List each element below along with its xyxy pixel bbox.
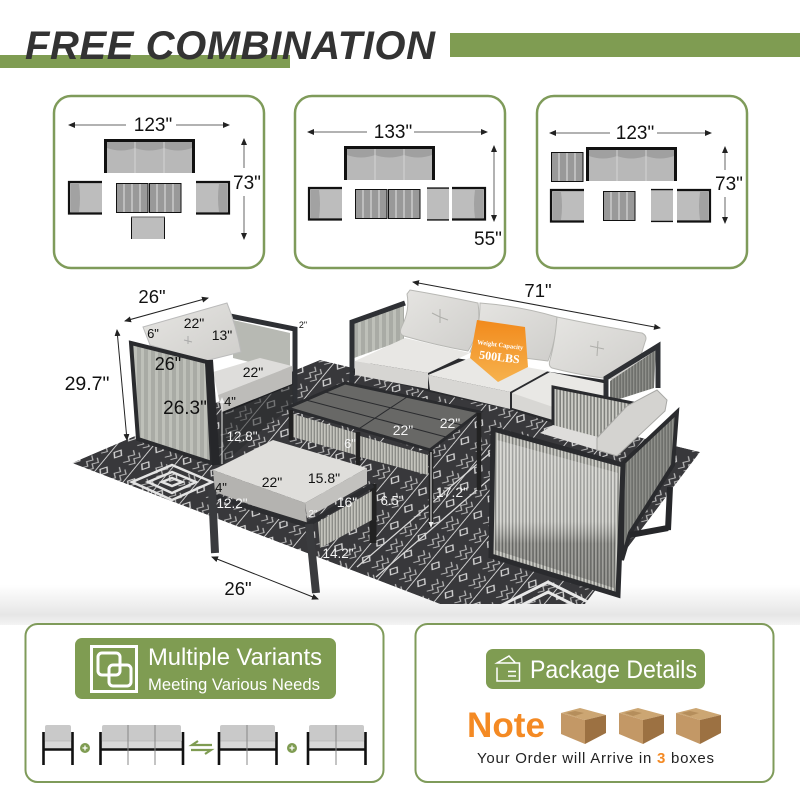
dimension labels black: 22" [243,364,263,380]
layout: left chair [308,187,342,220]
layout: sofa [344,146,435,180]
layout: right chair [452,187,486,220]
dimension labels white: 12.2" [216,496,248,511]
icon: box 1 [561,708,606,744]
icon: box 3 [676,708,721,744]
height dimension 73 [233,139,261,239]
ottoman back leg [370,484,376,543]
icon: plus [80,743,90,753]
dimension labels black: 26" [155,354,181,374]
weight capacity badge: 500LBS [478,348,521,366]
dimension labels white: 16" [337,494,357,510]
dimension labels black: 22" [262,474,282,490]
panel: multiple variants [26,624,384,782]
title accent bar right [450,33,800,57]
dimension labels white: 22" [440,415,460,431]
dimension labels black [65,280,552,599]
heading badge: multiple variants [75,638,336,699]
dimension labels black: 4" [215,480,227,495]
seat cushion [213,358,292,412]
dimension labels white: 12.8" [226,429,258,444]
front rope panel [131,343,212,463]
title: FREE COMBINATION [25,24,436,68]
icon: box 2 [619,708,664,744]
layout: coffee table [604,192,635,220]
panel: configuration 133 by 55 [295,96,505,268]
table top [287,383,480,450]
layout: right chair [196,181,230,214]
table legs [291,410,479,527]
sofa back cushions [400,290,646,381]
front rope panel [491,429,623,595]
icon: three-seat sofa [100,725,183,765]
layout: left chair [550,189,584,222]
layout: coffee tables [356,190,420,218]
dimension labels black: 26.3" [163,398,207,419]
layout: ottoman [131,217,165,239]
ottoman [212,440,373,593]
heading text: Multiple Variants [148,644,322,671]
sofa seat cushions [355,338,608,420]
title accent bar left [0,55,290,68]
table front weave right [360,436,428,475]
icon: swap arrows [191,741,212,754]
height dimension 73 [715,147,743,223]
sofa under-frame [352,350,606,424]
left armchair [131,303,295,465]
note text: Your Order will Arrive in 3 boxes [477,750,714,767]
icon: overlapping squares [92,646,136,692]
side panel [622,412,677,560]
layout: sofa [586,147,677,181]
icon: package [497,656,520,681]
panel: package details [416,624,774,782]
icon: two-seat sofa left [219,725,276,765]
panel: configuration 123 by 73 with ottoman [54,96,264,268]
dimension labels black: 4" [224,394,236,409]
height dimension 73: 73" [233,173,261,194]
sofa [352,290,658,424]
dimension labels white: 14.2" [322,546,354,561]
ottoman front legs [212,490,316,593]
under-frame [212,382,294,465]
dimension labels black: 13" [212,327,232,343]
height dimension 73: 73" [715,174,743,195]
weight capacity badge [470,320,528,382]
dimension labels white: 22" [393,422,413,438]
seat and back cushion [540,390,667,456]
ottoman side weave [318,491,372,548]
ottoman frame [213,485,373,525]
icon: single seat [44,725,72,765]
cushion seen through rope [495,440,618,588]
note label: Note [467,706,545,745]
patterned rug [72,360,700,606]
width dimension 123: 123" [616,123,654,144]
subheading text: Meeting Various Needs [148,675,320,694]
height dimension 55 [474,146,502,250]
width dimension 123: 123" [134,115,172,136]
layout: side table [552,152,583,182]
cushion tufting [432,309,604,356]
sofa left arm [352,303,405,385]
layout: left chair [68,181,102,214]
dimension labels black: 26" [224,578,252,599]
dimension labels white: 2" [308,509,318,520]
layout: ottoman [651,189,673,222]
dimension labels white: 17.2" [436,484,468,500]
rear side panel [230,316,295,405]
dimension labels black: 6" [147,326,159,341]
back cushion [143,303,241,361]
dimension labels black: 15.8" [308,470,340,486]
weight capacity badge: Weight Capacity [477,339,524,352]
sofa right arm [606,346,658,402]
coffee tables [287,383,480,527]
dimension labels white: 6" [344,436,356,451]
dimension labels black: 26" [138,286,166,307]
layout: right chair [677,189,711,222]
width dimension 133: 133" [374,122,412,143]
front post [209,360,216,465]
layout: sofa [104,139,195,173]
table front weave left [290,413,356,455]
icon: two-seat sofa right [308,725,366,765]
heading text: Package Details [530,656,697,684]
ottoman cushion [213,440,367,525]
dimension labels black: 2" [299,320,307,330]
dimension labels black: 22" [184,315,204,331]
dimension labels black: 71" [524,280,552,301]
panel: configuration 123 by 73 with side table [537,96,747,268]
layout: coffee tables [116,184,181,212]
table slats [306,392,462,437]
heading badge: package details [486,649,705,689]
side legs [630,487,670,535]
dimension labels white [216,415,468,561]
height dimension 55: 55" [474,229,502,250]
layout: ottoman [427,188,449,220]
rear rope panel [553,387,633,445]
icon: plus [287,743,297,753]
right armchair [491,387,677,595]
dimension labels white: 6.5" [381,493,404,508]
dimension arrows [117,282,660,599]
dimension labels black: 29.7" [65,373,110,395]
background fade band [0,585,800,625]
